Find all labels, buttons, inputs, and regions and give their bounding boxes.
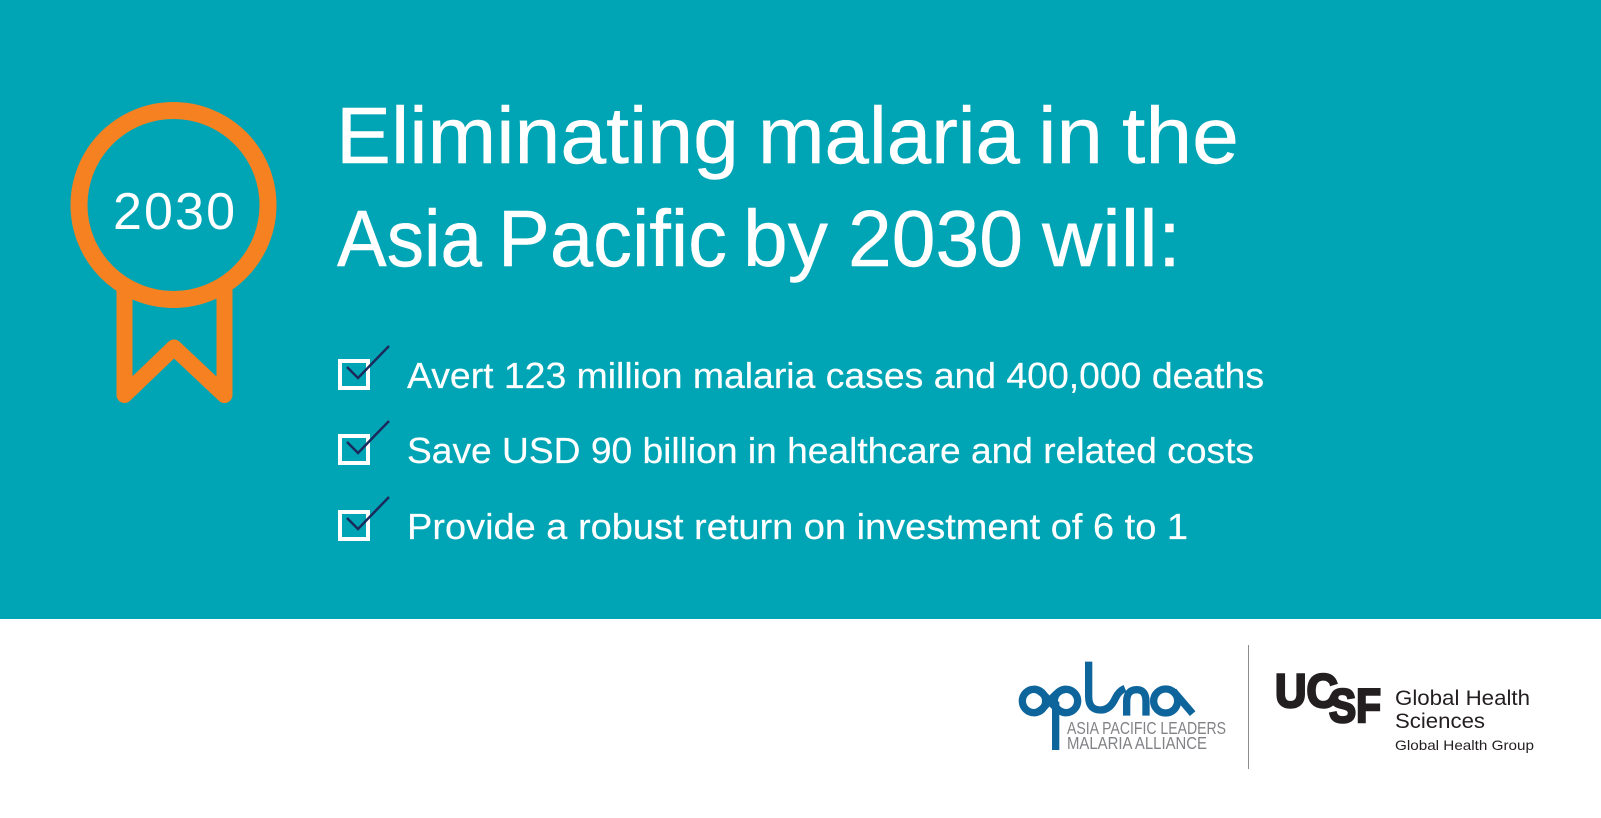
title: will: [1041,194,1181,283]
teal banner [0,0,1601,619]
icon: 2030 medal [79,110,268,395]
UCSF unit name: Sciences [1395,710,1485,733]
item: avert cases: Avert 123 million malaria cases and 400,000 deaths [407,355,1264,396]
title [336,91,1239,283]
logo divider [1248,645,1249,769]
aplma name: MALARIA ALLIANCE [1067,733,1207,753]
aplma name [1067,718,1226,753]
UCSF unit name: Global Health Group [1395,737,1534,753]
title: the [1122,91,1239,180]
title: in [1038,91,1103,180]
checklist [340,346,1264,547]
medal year: 2030 [113,183,235,241]
UCSF logo [1275,664,1534,753]
UCSF wordmark: UC [1275,664,1338,717]
item: save costs: Save USD 90 billion in healthcare and related costs [407,430,1254,471]
title: 2030 [848,194,1023,283]
item: return on investment: Provide a robust return on investment of 6 to 1 [407,506,1188,547]
UCSF wordmark: SF [1329,679,1381,732]
title: Pacific [498,194,727,283]
UCSF wordmark [1275,664,1381,732]
aplma mark [1022,662,1193,750]
medal ring [79,110,268,300]
APLMA logo [1022,662,1226,753]
UCSF unit name: Global Health [1395,687,1530,710]
medal ribbon [124,290,224,395]
title: Asia [337,194,482,283]
aplma name: ASIA PACIFIC LEADERS [1067,718,1226,738]
title: Eliminating [336,91,739,180]
UCSF unit name [1395,687,1534,753]
title: malaria [758,91,1020,180]
title: by [743,194,828,283]
